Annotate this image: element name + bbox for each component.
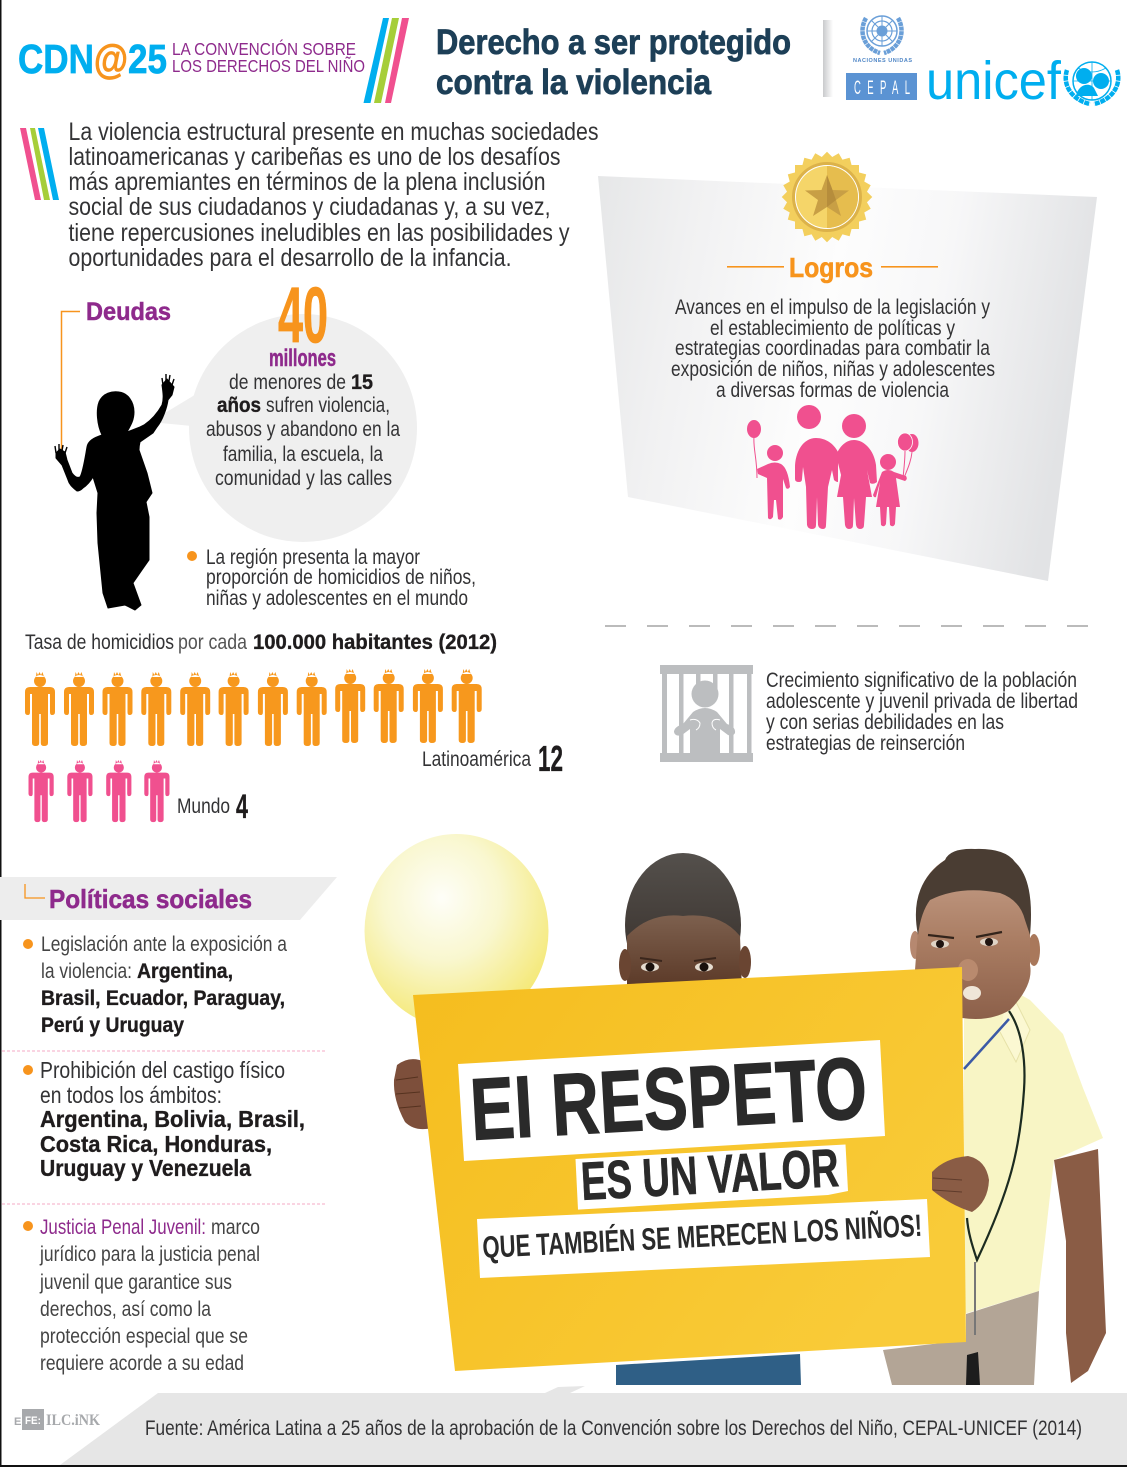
boy on the left bbox=[616, 853, 801, 1385]
intro text block: social de sus ciudadanos y ciudadanas y, a su vez, bbox=[68, 193, 550, 221]
logros text: Avances en el impulso de la legislación y bbox=[675, 296, 990, 319]
header separator bbox=[823, 20, 833, 97]
statistic: 40 millones: 40 bbox=[278, 270, 328, 359]
icon: child silhouette bbox=[55, 374, 174, 610]
policy 3: juvenile justice: protección especial que se bbox=[40, 1325, 248, 1348]
title: contra la violencia bbox=[436, 63, 711, 102]
policy 2: physical punishment ban: Argentina, Bolivia, Brasil, bbox=[40, 1106, 305, 1132]
logros text: estrategias coordinadas para combatir la bbox=[675, 337, 990, 360]
credit: EFE ILC.iNK: FE: bbox=[25, 1415, 41, 1427]
heading: Logros: Logros bbox=[789, 252, 873, 283]
policy 3: juvenile justice: jurídico para la justicia penal bbox=[39, 1243, 260, 1266]
policy 3: juvenile justice: marco bbox=[211, 1216, 260, 1239]
policy 1: legislation: la violencia: bbox=[41, 960, 132, 983]
title: Derecho a ser protegido bbox=[436, 23, 791, 62]
bubble text: 15 bbox=[351, 371, 373, 394]
logros text: a diversas formas de violencia bbox=[716, 379, 949, 402]
policy 1: legislation: Perú y Uruguay bbox=[41, 1014, 184, 1037]
chart heading: homicide rate: 100.000 habitantes (2012) bbox=[253, 631, 497, 654]
boy on the right bbox=[883, 849, 1106, 1385]
pictogram chart: Latinoamérica 12: 12 bbox=[538, 738, 563, 779]
text: juvenile incarceration: y con serias debilidades en las bbox=[766, 711, 1004, 734]
policy 1: legislation: Legislación ante la exposición a bbox=[41, 933, 287, 956]
callout: region homicide proportion: La región presenta la mayor bbox=[206, 546, 420, 569]
chart heading: homicide rate: Tasa de homicidios bbox=[25, 631, 174, 654]
header logo: CDN@25 bbox=[18, 36, 365, 82]
pictogram chart: Mundo 4: Mundo bbox=[177, 795, 230, 818]
header logo: CDN@25: CDN@25 bbox=[18, 36, 167, 82]
panel background bbox=[598, 176, 1097, 581]
text: juvenile incarceration: estrategias de reinserción bbox=[766, 732, 965, 755]
bubble text: sufren violencia, bbox=[266, 394, 390, 417]
policy 2: physical punishment ban: Prohibición del castigo físico bbox=[40, 1057, 285, 1083]
logo: CEPAL / Naciones Unidas: CEPAL bbox=[854, 78, 910, 99]
sign strip 2: ES UN VALOR bbox=[579, 1138, 840, 1212]
policy 1: legislation bbox=[23, 933, 287, 1037]
panel: logros bbox=[598, 152, 1097, 581]
pictogram chart: Mundo 4 bbox=[28, 760, 248, 826]
logo: unicef: unicef bbox=[926, 51, 1062, 111]
intro text block: más apremiantes en términos de la plena inclusión bbox=[68, 168, 546, 196]
pictogram chart: Latinoamérica 12 bbox=[25, 669, 563, 779]
section heading: Políticas sociales bbox=[0, 877, 337, 920]
yellow balloon bbox=[364, 834, 548, 1028]
statistic: 40 millones: millones bbox=[269, 345, 336, 372]
header logo: CDN@25: LA CONVENCIÓN SOBRE bbox=[172, 38, 356, 59]
section: deudas bbox=[62, 298, 171, 450]
policy 3: juvenile justice: derechos, así como la bbox=[40, 1298, 211, 1321]
policy 2: physical punishment ban: Uruguay y Venezuela bbox=[40, 1155, 251, 1181]
bubble text: abusos y abandono en la bbox=[206, 418, 400, 441]
bubble text: de menores de bbox=[229, 371, 346, 394]
logros text: el establecimiento de políticas y bbox=[710, 317, 955, 340]
icon: child behind bars bbox=[660, 665, 753, 762]
intro text block: La violencia estructural presente en muchas sociedades bbox=[68, 118, 598, 146]
pictogram chart: Mundo 4: 4 bbox=[236, 788, 248, 826]
photo: children holding sign bbox=[364, 834, 1106, 1385]
heading: Deudas: Deudas bbox=[86, 298, 171, 326]
sign strip 1: EI RESPETO bbox=[468, 1038, 869, 1159]
sign strip 2 bbox=[576, 1138, 848, 1212]
right hand bbox=[932, 1156, 989, 1212]
icon: unicef emblem bbox=[1066, 62, 1118, 104]
intro text block: tiene repercusiones ineludibles en las posibilidades y bbox=[68, 219, 570, 247]
logo: CEPAL / Naciones Unidas bbox=[846, 16, 917, 100]
bracket line bbox=[62, 312, 80, 450]
left hand bbox=[394, 1059, 432, 1129]
callout: region homicide proportion: niñas y adolescentes en el mundo bbox=[206, 587, 468, 610]
chart heading: homicide rate bbox=[25, 631, 497, 654]
credit: EFE ILC.iNK: ILC.iNK bbox=[46, 1412, 100, 1429]
pictogram chart: Latinoamérica 12: Latinoamérica bbox=[422, 748, 531, 771]
policy 2: physical punishment ban: Costa Rica, Honduras, bbox=[40, 1131, 272, 1157]
statistic: 40 millones bbox=[269, 270, 336, 372]
yellow sign bbox=[413, 967, 966, 1371]
chart heading: homicide rate: por cada bbox=[178, 631, 247, 654]
callout: region homicide proportion: proporción de homicidios de niños, bbox=[206, 566, 476, 589]
speech bubble bbox=[150, 314, 417, 542]
credit: EFE ILC.iNK bbox=[14, 1409, 100, 1430]
policy 2: physical punishment ban bbox=[23, 1057, 305, 1181]
intro text block: oportunidades para el desarrollo de la infancia. bbox=[68, 244, 512, 272]
policy 3: juvenile justice: juvenil que garantice sus bbox=[39, 1271, 232, 1294]
policy 3: juvenile justice: Justicia Penal Juvenil: bbox=[40, 1216, 206, 1239]
section heading: Políticas sociales: Políticas sociales bbox=[49, 884, 252, 914]
callout: region homicide proportion bbox=[187, 546, 476, 610]
intro text block bbox=[68, 118, 598, 272]
policy 1: legislation: Argentina, bbox=[137, 960, 233, 983]
dashed separator bbox=[605, 625, 1092, 627]
logros text: exposición de niños, niñas y adolescentes bbox=[671, 358, 995, 381]
intro stripes bbox=[20, 128, 59, 200]
sign strip 3 bbox=[477, 1199, 930, 1278]
bubble text: familia, la escuela, la bbox=[223, 443, 383, 466]
logo: CEPAL / Naciones Unidas: NACIONES UNIDAS bbox=[853, 58, 912, 64]
header logo: CDN@25: LOS DERECHOS DEL NIÑO bbox=[172, 55, 365, 76]
credit: EFE ILC.iNK: E bbox=[14, 1416, 21, 1428]
sign strip 3: QUE TAMBIÉN SE MERECEN LOS NIÑOS! bbox=[482, 1208, 923, 1265]
policy 3: juvenile justice: requiere acorde a su edad bbox=[40, 1352, 244, 1375]
header coloured stripes bbox=[364, 18, 409, 103]
logros text bbox=[671, 296, 995, 402]
icon: family with balloons bbox=[747, 405, 918, 529]
bubble text: años bbox=[217, 394, 261, 417]
bubble text bbox=[206, 371, 400, 490]
intro text block: latinoamericanas y caribeñas es uno de los desafíos bbox=[68, 143, 560, 171]
icon: gold medal bbox=[782, 152, 872, 242]
title bbox=[436, 23, 791, 102]
text: juvenile incarceration bbox=[766, 669, 1078, 755]
icon: UN emblem bbox=[862, 16, 902, 53]
policy 1: legislation: Brasil, Ecuador, Paraguay, bbox=[41, 987, 285, 1010]
policy 3: juvenile justice bbox=[23, 1216, 260, 1375]
bubble text: comunidad y las calles bbox=[215, 467, 392, 490]
policy 2: physical punishment ban: en todos los ámbitos: bbox=[40, 1082, 222, 1108]
footer band bbox=[60, 1386, 1127, 1465]
